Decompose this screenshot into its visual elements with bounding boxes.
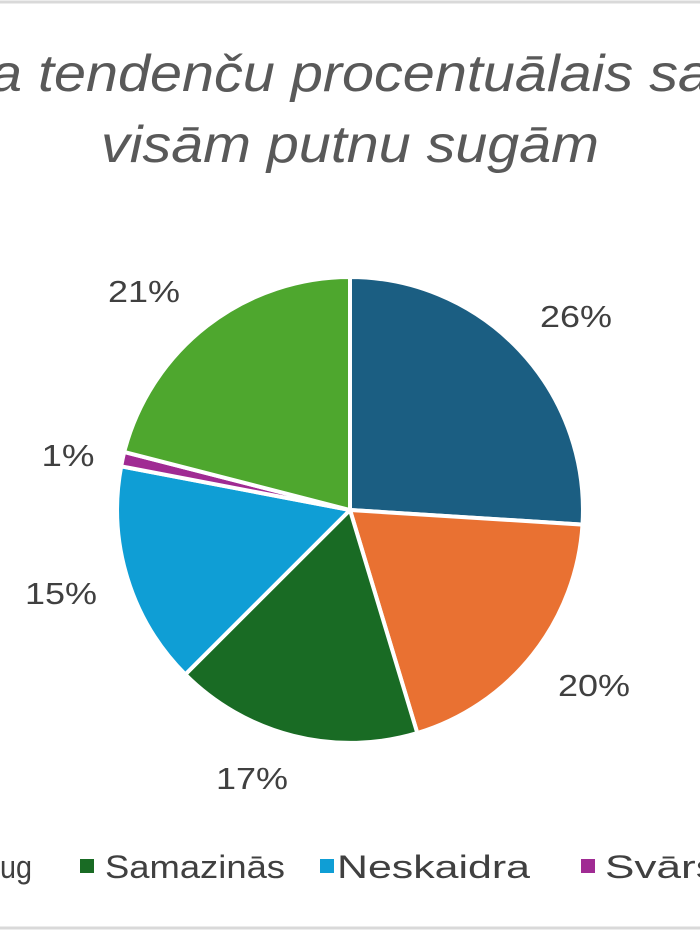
slice: 1% — [121, 452, 350, 510]
data labels — [25, 274, 630, 796]
slice: 20% — [350, 510, 582, 733]
data labels: 26% — [540, 299, 612, 334]
slice: 26% — [350, 277, 583, 525]
title: a tendenču procentuālais sa — [0, 45, 700, 103]
title — [0, 45, 700, 174]
data labels: 20% — [558, 668, 630, 703]
pie chart — [117, 277, 583, 743]
legend — [0, 849, 700, 885]
data labels: 21% — [108, 274, 180, 309]
legend: ug — [0, 849, 32, 885]
slice: 21% — [124, 277, 350, 510]
data labels: 1% — [42, 438, 94, 473]
legend: Neskaidra — [337, 849, 530, 885]
legend: Svārst — [605, 849, 700, 885]
slice: 17% — [185, 510, 417, 743]
legend: Samazinās — [105, 849, 285, 885]
data labels: 15% — [25, 576, 97, 611]
title: visām putnu sugām — [101, 116, 599, 174]
slice: 15% — [117, 466, 350, 674]
data labels: 17% — [216, 761, 288, 796]
